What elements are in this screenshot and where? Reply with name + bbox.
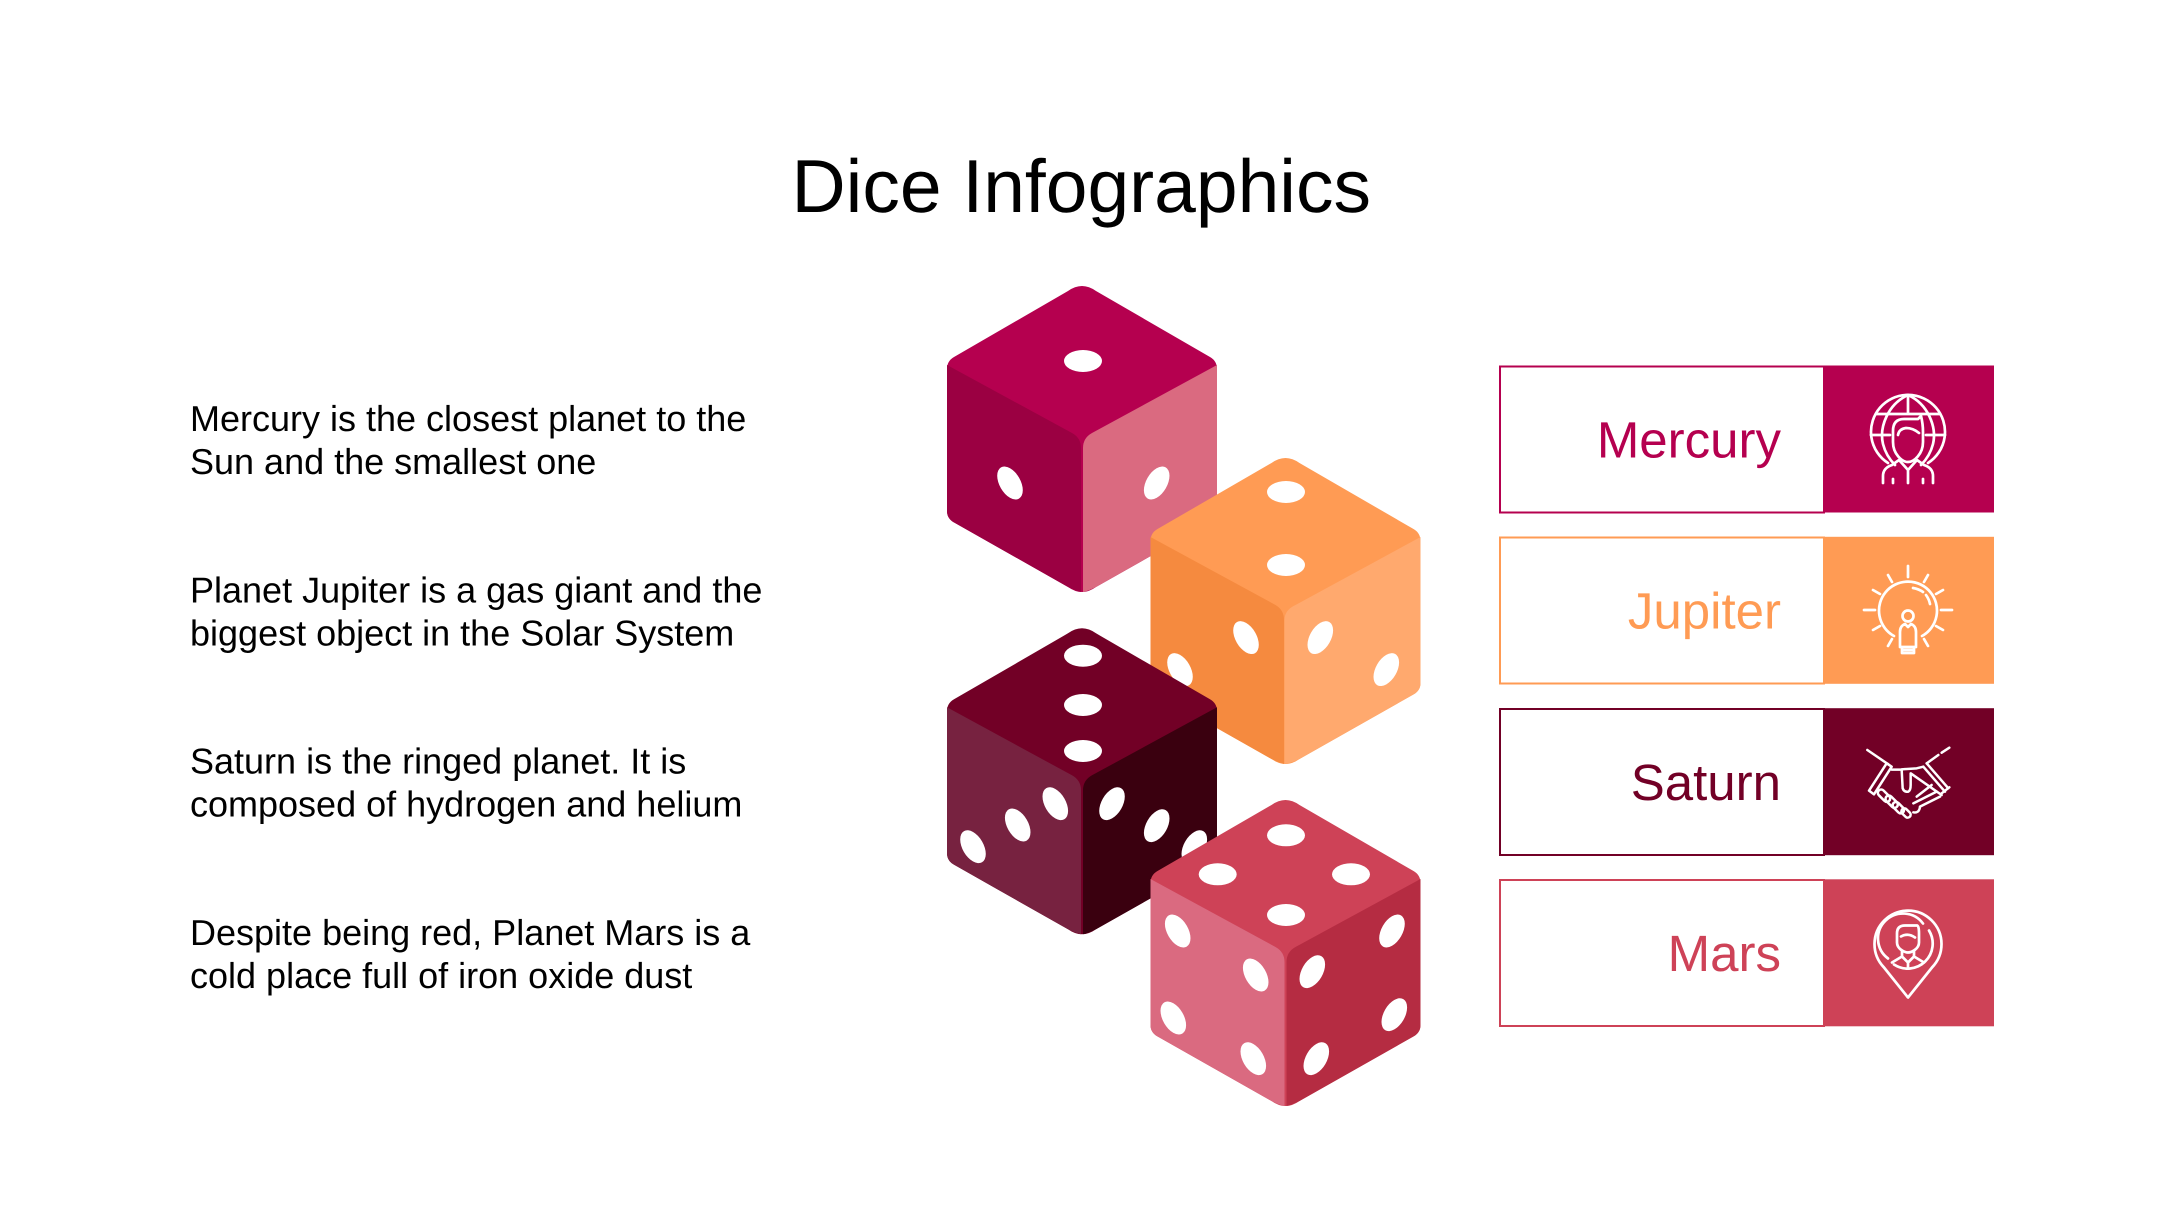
- panel: Mercury card: [1500, 366, 1994, 512]
- text block: Mars: Despite being red, Planet Mars is a: [190, 912, 751, 953]
- die: maroon, three pips per face: [947, 628, 1217, 934]
- text block: Mars: [190, 912, 751, 996]
- panel: Jupiter card: [1500, 537, 1994, 684]
- text block: Saturn: composed of hydrogen and helium: [190, 784, 742, 824]
- label: Jupiter: Jupiter: [1628, 582, 1781, 640]
- panel: Saturn card: [1500, 708, 1994, 855]
- text block: Jupiter: [190, 570, 762, 654]
- text block: Saturn: Saturn is the ringed planet. It is: [190, 740, 686, 782]
- die: coral red, four pips per face: [1150, 800, 1420, 1106]
- text block: Jupiter: biggest object in the Solar System: [190, 612, 734, 654]
- label: Saturn: Saturn: [1631, 754, 1781, 811]
- text block: Mercury: [190, 398, 746, 482]
- panel: Mars card: [1500, 879, 1994, 1026]
- icon: handshake: [1867, 748, 1949, 819]
- icon: light bulb and person: [1864, 566, 1952, 653]
- text block: Saturn: [190, 740, 742, 824]
- text block: Mercury: Sun and the smallest one: [190, 441, 596, 482]
- die: crimson, one pip per face: [947, 286, 1217, 592]
- text block: Jupiter: Planet Jupiter is a gas giant and the: [190, 570, 762, 610]
- text block: Mercury: Mercury is the closest planet to the: [190, 398, 746, 439]
- icon: location pin and person: [1874, 911, 1942, 998]
- label: Mars: Mars: [1668, 925, 1781, 982]
- title: Dice Infographics: [792, 144, 1371, 228]
- icon: globe and person: [1871, 395, 1945, 483]
- label: Mercury: Mercury: [1597, 412, 1781, 468]
- die: orange, two pips per face: [1150, 458, 1420, 764]
- text block: Mars: cold place full of iron oxide dust: [190, 955, 692, 996]
